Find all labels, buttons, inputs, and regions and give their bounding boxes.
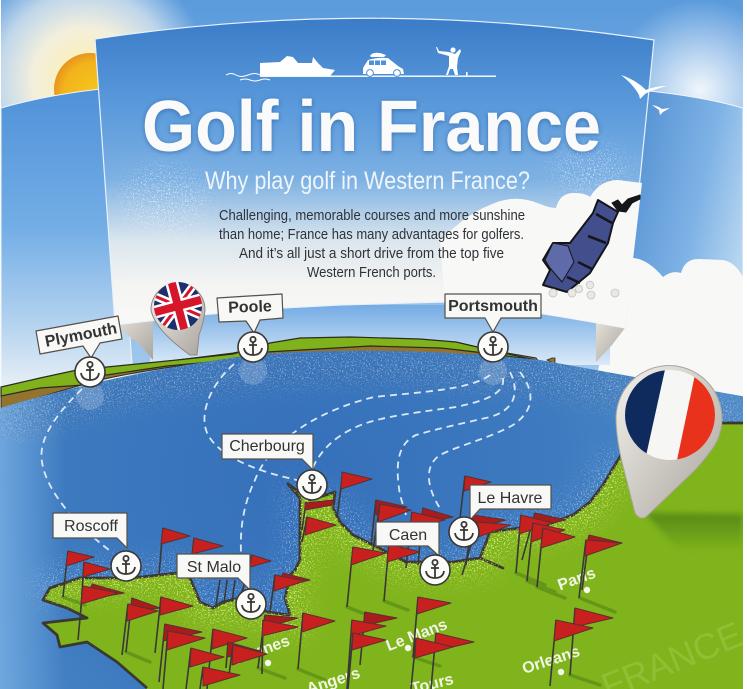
port: Plymouth <box>36 316 122 387</box>
flags: north coast back row <box>63 472 622 612</box>
port: Le Havre <box>449 485 551 547</box>
back banner: left <box>1 88 135 400</box>
icon: golf bag <box>543 195 640 292</box>
intro text <box>219 207 525 281</box>
shoreline <box>260 76 496 77</box>
anchor <box>75 357 105 387</box>
subtitle: Why play golf in Western France? <box>205 167 530 195</box>
cliffs <box>1 338 542 410</box>
seagull small <box>652 105 670 115</box>
city: Paris: Paris <box>556 565 598 594</box>
port: Poole <box>217 294 283 362</box>
sky background <box>1 0 743 420</box>
sea speckle along UK shore <box>0 350 743 619</box>
intro text: And it’s all just a short drive from the top five <box>239 245 504 262</box>
UK pin <box>150 282 206 356</box>
land speckle along coast <box>43 456 630 648</box>
UK coastline <box>1 337 555 410</box>
France land <box>43 423 743 689</box>
icon: golfer <box>436 47 468 76</box>
intro text: than home; France has many advantages for golfers. <box>219 226 524 243</box>
right sky haze <box>610 0 743 180</box>
sea <box>0 351 747 689</box>
port: Roscoff <box>53 513 141 581</box>
seagull large <box>621 75 667 99</box>
port: Caen <box>376 522 450 585</box>
route: Portsmouth to Le Havre <box>429 372 530 510</box>
flag ground shadows <box>63 573 615 685</box>
sea lighter left side <box>0 354 300 689</box>
label: St Malo: St Malo <box>187 559 241 576</box>
back banner: right <box>600 90 743 400</box>
sun haze <box>1 0 231 210</box>
anchor <box>297 470 327 500</box>
coastline stroke <box>43 423 743 688</box>
route: Portsmouth to Cherbourg <box>310 378 503 475</box>
clouds on right back banner <box>590 258 743 400</box>
label: Caen: Caen <box>389 527 427 544</box>
waves <box>226 74 270 81</box>
page margin right <box>743 0 747 689</box>
anchor <box>478 332 508 362</box>
anchor <box>420 555 450 585</box>
intro text: Challenging, memorable courses and more sunshine <box>219 207 525 224</box>
city: Le Mans: Le Mans <box>384 616 450 655</box>
port: Cherbourg <box>222 434 327 500</box>
route: Portsmouth to Caen <box>398 372 515 515</box>
France pin <box>616 365 722 518</box>
France pin shadow <box>645 513 743 552</box>
label: Portsmouth: Portsmouth <box>448 298 538 315</box>
port: Portsmouth <box>445 294 541 362</box>
anchor <box>238 332 268 362</box>
banner speckle <box>110 132 642 240</box>
anchor <box>236 589 266 619</box>
anchor <box>111 551 141 581</box>
banner clouds <box>440 180 642 328</box>
icon: ferry <box>260 56 335 76</box>
title: Golf in France <box>142 87 601 167</box>
intro text: Western French ports. <box>307 264 436 281</box>
horizon sky behind the UK coast <box>150 305 610 365</box>
city: Rennes: Rennes <box>232 633 292 668</box>
icon: car <box>363 53 404 76</box>
green land <box>1 337 535 396</box>
label: Le Havre: Le Havre <box>478 490 543 507</box>
label: Plymouth: Plymouth <box>44 320 118 351</box>
label: Cherbourg: Cherbourg <box>229 438 305 455</box>
small distant cliff <box>547 358 555 364</box>
transport silhouettes <box>226 47 496 81</box>
label: Poole: Poole <box>228 298 272 317</box>
route: Plymouth to Roscoff <box>41 389 113 553</box>
sun <box>54 53 126 125</box>
UK flag <box>154 282 202 330</box>
flags: inland rows <box>78 584 613 689</box>
route: Portsmouth to St Malo <box>241 375 490 552</box>
front pocket <box>545 243 574 282</box>
main banner <box>95 18 655 328</box>
ferry routes <box>41 364 530 553</box>
bag body <box>543 200 618 292</box>
France flag <box>625 370 715 460</box>
label: Roscoff: Roscoff <box>64 518 119 535</box>
handles <box>612 195 640 212</box>
port: St Malo <box>177 554 266 619</box>
anchor reflections <box>76 357 507 410</box>
main banner fold: right <box>596 322 625 362</box>
main banner fold: left <box>115 320 153 360</box>
city: Orleans: Orleans <box>520 643 582 678</box>
golf balls <box>549 281 619 299</box>
anchor <box>449 517 479 547</box>
route: Poole to Cherbourg <box>204 364 297 480</box>
flags <box>63 472 622 689</box>
